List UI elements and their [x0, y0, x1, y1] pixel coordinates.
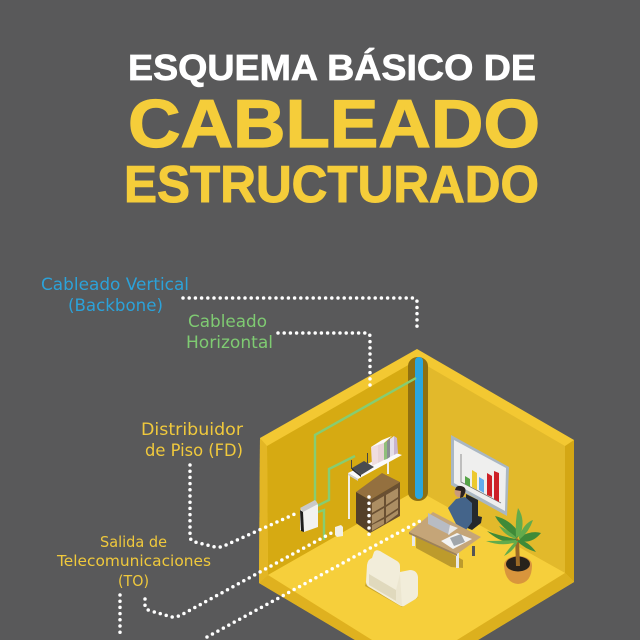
label: cableado horizontal: Horizontal [186, 333, 273, 352]
leader: bottom left [118, 595, 122, 637]
label: cableado vertical: Cableado Vertical [41, 275, 189, 294]
label: salida de telecomunicaciones: Salida de [100, 533, 167, 551]
shelf [348, 452, 402, 519]
floor distributor box [300, 500, 318, 532]
label: distribuidor de piso: de Piso (FD) [145, 441, 243, 460]
title: ESQUEMA BÁSICO DE [128, 47, 536, 88]
office worker [448, 486, 482, 530]
telecom outlet [335, 525, 343, 537]
room: floor front edge left [259, 575, 372, 640]
room: right wall [417, 360, 565, 573]
label: cableado vertical [41, 275, 189, 315]
room: outer walls rim [259, 349, 574, 640]
room: left end face [259, 438, 268, 583]
books [371, 436, 398, 466]
room: floor front edge right [457, 573, 574, 640]
label: salida de telecomunicaciones: Telecomunicaciones [56, 552, 211, 570]
router [351, 453, 374, 477]
backbone cable recess [408, 357, 428, 501]
label: cableado vertical: (Backbone) [68, 296, 163, 315]
room: floor [268, 490, 565, 640]
label: salida de telecomunicaciones [56, 533, 211, 590]
drawers [356, 473, 400, 533]
title: CABLEADO [128, 86, 540, 162]
desk [409, 512, 481, 568]
label: distribuidor de piso: Distribuidor [141, 420, 243, 439]
isometric room [259, 349, 574, 640]
backbone cable [415, 357, 423, 499]
leader: telecom outlet [145, 531, 335, 617]
title [124, 47, 540, 214]
room: right end face [565, 440, 574, 582]
wall chart [451, 435, 509, 516]
room: left wall [267, 360, 417, 575]
leader: vertical backbone [183, 298, 417, 332]
leader: workstation [207, 521, 420, 637]
leader: horizontal cabling lower [367, 497, 371, 538]
label: distribuidor de piso [141, 420, 243, 460]
armchair [365, 550, 419, 607]
label: cableado horizontal: Cableado [188, 312, 267, 331]
plant [486, 508, 541, 584]
leader: horizontal cabling [278, 333, 370, 388]
label: cableado horizontal [186, 312, 273, 352]
title: ESTRUCTURADO [124, 156, 539, 214]
label: salida de telecomunicaciones: (TO) [118, 572, 149, 590]
leader: floor distributor [190, 465, 297, 547]
horizontal cabling [315, 378, 416, 540]
